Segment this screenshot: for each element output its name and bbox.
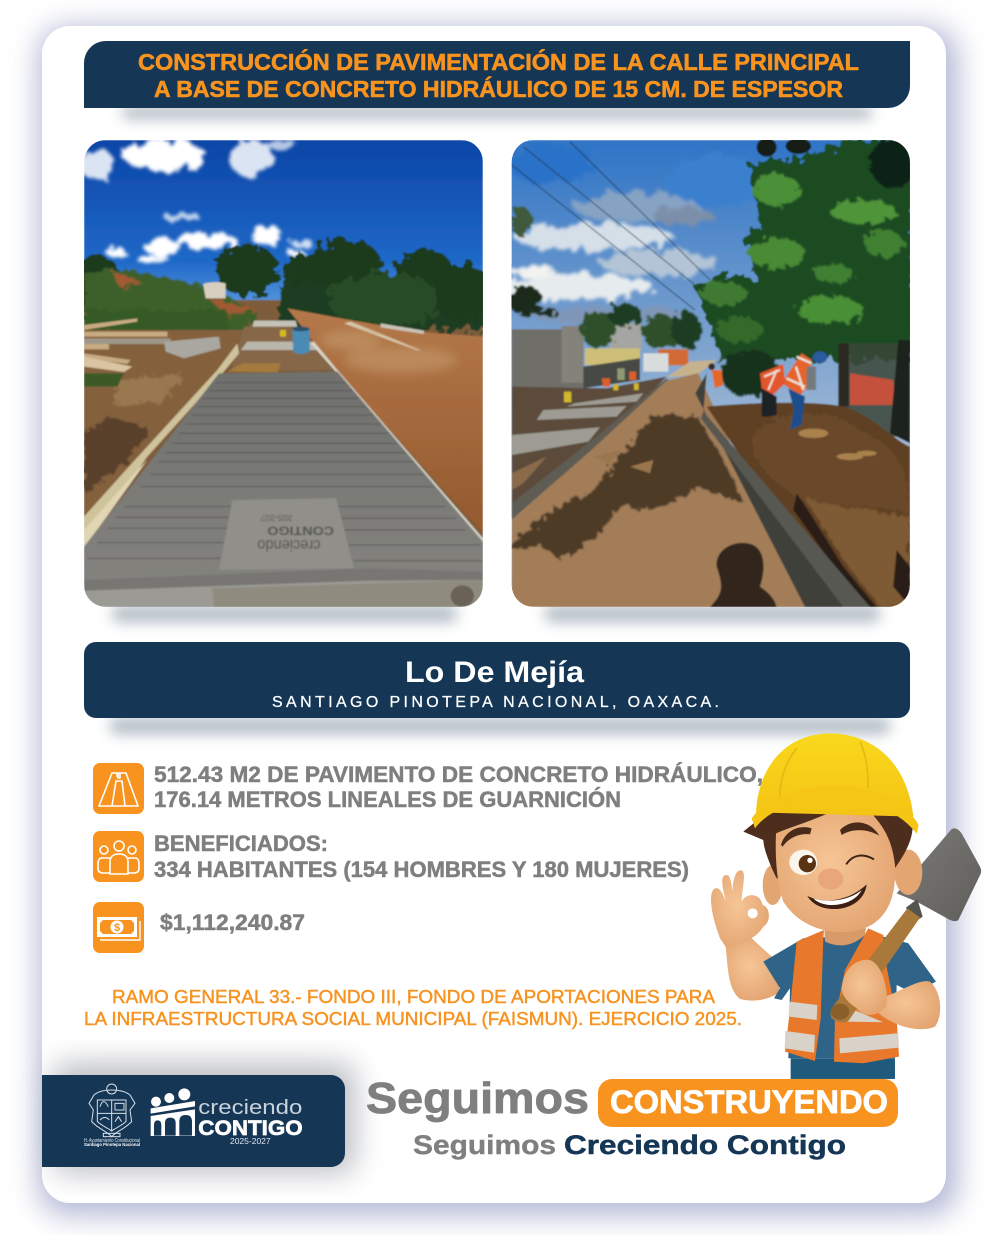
text: funding source: LA INFRAESTRUCTURA SOCIAL MUNICIPAL (FAISMUN). EJERCICIO 2025. xyxy=(84,1008,742,1029)
text: pavement metrics xyxy=(154,762,763,812)
stamp text: CONTIGO xyxy=(267,524,334,538)
right arm + hand xyxy=(877,981,940,1029)
slogan pill: CONSTRUYENDO: CONSTRUYENDO xyxy=(610,1084,888,1120)
title line 1: CONSTRUCCIÓN DE PAVIMENTACIÓN DE LA CALLE PRINCIPAL xyxy=(138,48,859,75)
text: pavement metrics: 176.14 METROS LINEALES DE GUARNICIÓN xyxy=(154,787,621,812)
ears xyxy=(763,865,783,905)
text: beneficiaries xyxy=(154,831,689,882)
tagline: Creciendo Contigo xyxy=(564,1130,846,1160)
shadows under panels xyxy=(110,106,890,734)
Creciendo Contigo logo: 2025-2027 xyxy=(230,1136,271,1146)
trees xyxy=(72,238,492,330)
text: funding source xyxy=(84,986,742,1029)
right curb xyxy=(694,374,844,607)
nose xyxy=(818,868,843,890)
left arm + hand xyxy=(725,938,780,1001)
stamp area xyxy=(219,498,354,570)
text: pavement metrics: 512.43 M2 DE PAVIMENTO DE CONCRETO HIDRÁULICO, xyxy=(154,762,763,787)
photo: freshly poured concrete road xyxy=(72,138,492,607)
helmet dome xyxy=(756,733,913,817)
ground left xyxy=(84,330,247,517)
winking eye xyxy=(847,855,873,864)
lumber xyxy=(84,318,171,372)
hair xyxy=(743,794,913,878)
Creciendo Contigo logo: creciendo xyxy=(198,1097,302,1119)
tree shadow on road xyxy=(512,415,743,558)
helmet brim xyxy=(752,785,919,834)
place name: Lo De Mejía xyxy=(405,656,584,689)
panel: logos: Santiago Pinotepa Nacional xyxy=(84,1142,140,1147)
workers xyxy=(564,351,827,430)
face xyxy=(776,805,895,932)
municipal seal xyxy=(89,1084,135,1137)
stamp text xyxy=(257,513,334,553)
text: funding source: RAMO GENERAL 33.- FONDO III, FONDO DE APORTACIONES PARA xyxy=(112,986,716,1007)
character: construction worker boy xyxy=(711,733,981,1079)
left work area xyxy=(512,377,667,517)
icon: people xyxy=(93,831,144,882)
rubble xyxy=(164,337,221,358)
buildings xyxy=(512,329,583,388)
left foliage xyxy=(508,207,558,316)
heading banner xyxy=(84,41,910,108)
panel: location xyxy=(84,642,910,718)
grass patch xyxy=(84,373,124,387)
fence + red xyxy=(843,343,898,438)
panel: logos xyxy=(42,1062,356,1174)
shovel shaft xyxy=(830,908,920,1022)
text: investment amount: $1,112,240.87 xyxy=(160,910,305,935)
concrete slab xyxy=(84,371,483,580)
hillside xyxy=(84,268,257,337)
background trees xyxy=(582,303,702,348)
road xyxy=(667,360,717,377)
upper slabs xyxy=(231,327,332,372)
slogan: Seguimos: Seguimos xyxy=(366,1074,589,1123)
text: beneficiaries: BENEFICIADOS: xyxy=(154,831,328,856)
slogan pill: CONSTRUYENDO xyxy=(598,1079,898,1127)
right edge line xyxy=(311,342,483,543)
icon: money: $ xyxy=(114,922,120,934)
neck xyxy=(824,922,867,945)
pants xyxy=(791,1058,895,1079)
vest xyxy=(785,930,824,1061)
big tree xyxy=(695,140,913,360)
eyebrows xyxy=(781,822,879,847)
dirt mound xyxy=(707,403,910,607)
shovel socket xyxy=(906,899,923,923)
text: beneficiaries: 334 HABITANTES (154 HOMBRES Y 180 MUJERES) xyxy=(154,857,689,882)
shovel head xyxy=(897,828,981,921)
curb left xyxy=(84,343,239,547)
icon: road xyxy=(93,763,144,814)
stamp text: creciendo xyxy=(257,536,321,553)
Creciendo Contigo logo xyxy=(151,1088,303,1146)
tagline: Seguimos xyxy=(413,1130,556,1160)
barrel xyxy=(292,327,310,354)
power lines xyxy=(512,142,710,310)
shirt xyxy=(763,935,936,1058)
smile xyxy=(807,884,867,909)
bottom band xyxy=(84,568,483,591)
title line 2: A BASE DE CONCRETO HIDRÁULICO DE 15 CM. DE ESPESOR xyxy=(154,75,843,102)
water tank xyxy=(203,282,226,298)
seal caption: H. Ayuntamiento Constitucional xyxy=(84,1138,140,1144)
municipality: SANTIAGO PINOTEPA NACIONAL, OAXACA. xyxy=(272,694,719,711)
stamp text: 2025-2027 xyxy=(260,513,292,522)
photo: road with curb and workers xyxy=(500,138,917,607)
open eye xyxy=(789,850,817,875)
Creciendo Contigo logo: CONTIGO xyxy=(198,1116,303,1140)
tagline xyxy=(413,1130,846,1160)
icon: money xyxy=(93,902,144,953)
ground right xyxy=(287,308,483,533)
person shadow xyxy=(710,543,777,607)
